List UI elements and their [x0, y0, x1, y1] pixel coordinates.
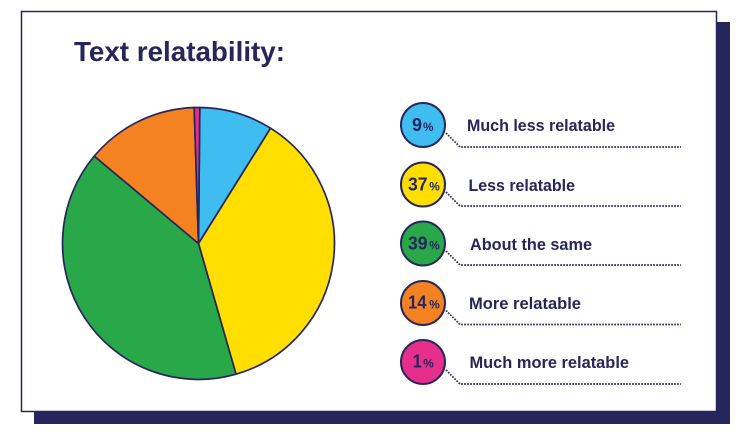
legend item: about the same — [401, 222, 681, 266]
legend item: much less relatable: Much less relatable — [467, 116, 615, 135]
legend item: more relatable: 14 — [408, 292, 426, 312]
legend item: about the same: About the same — [470, 235, 592, 254]
legend item: much less relatable: 9 — [412, 115, 422, 135]
slice: less relatable 37% — [198, 128, 334, 374]
legend item: less relatable — [401, 162, 681, 206]
legend item: much more relatable: % — [423, 358, 434, 370]
legend item: less relatable: Less relatable — [468, 176, 575, 195]
legend item: much more relatable: 1 — [413, 352, 422, 372]
legend — [401, 103, 681, 384]
slice: about the same 39% — [63, 156, 236, 379]
title: Text relatability: — [74, 36, 285, 67]
legend item: more relatable: More relatable — [469, 294, 581, 313]
pie chart — [63, 107, 334, 379]
legend item: more relatable — [401, 281, 681, 325]
legend item: more relatable: % — [429, 300, 440, 312]
legend item: much more relatable: Much more relatable — [470, 353, 629, 372]
legend item: much less relatable — [401, 103, 681, 147]
slice: much more relatable 1% — [194, 107, 200, 244]
legend item: less relatable: % — [429, 182, 440, 194]
legend item: much less relatable: % — [423, 122, 434, 134]
slice: more relatable 14% — [94, 108, 198, 244]
legend item: much more relatable — [401, 340, 681, 384]
slice: much less relatable 9% — [198, 108, 271, 244]
legend item: less relatable: 37 — [408, 174, 428, 194]
legend item: about the same: % — [429, 240, 440, 252]
legend item: about the same: 39 — [408, 234, 428, 254]
